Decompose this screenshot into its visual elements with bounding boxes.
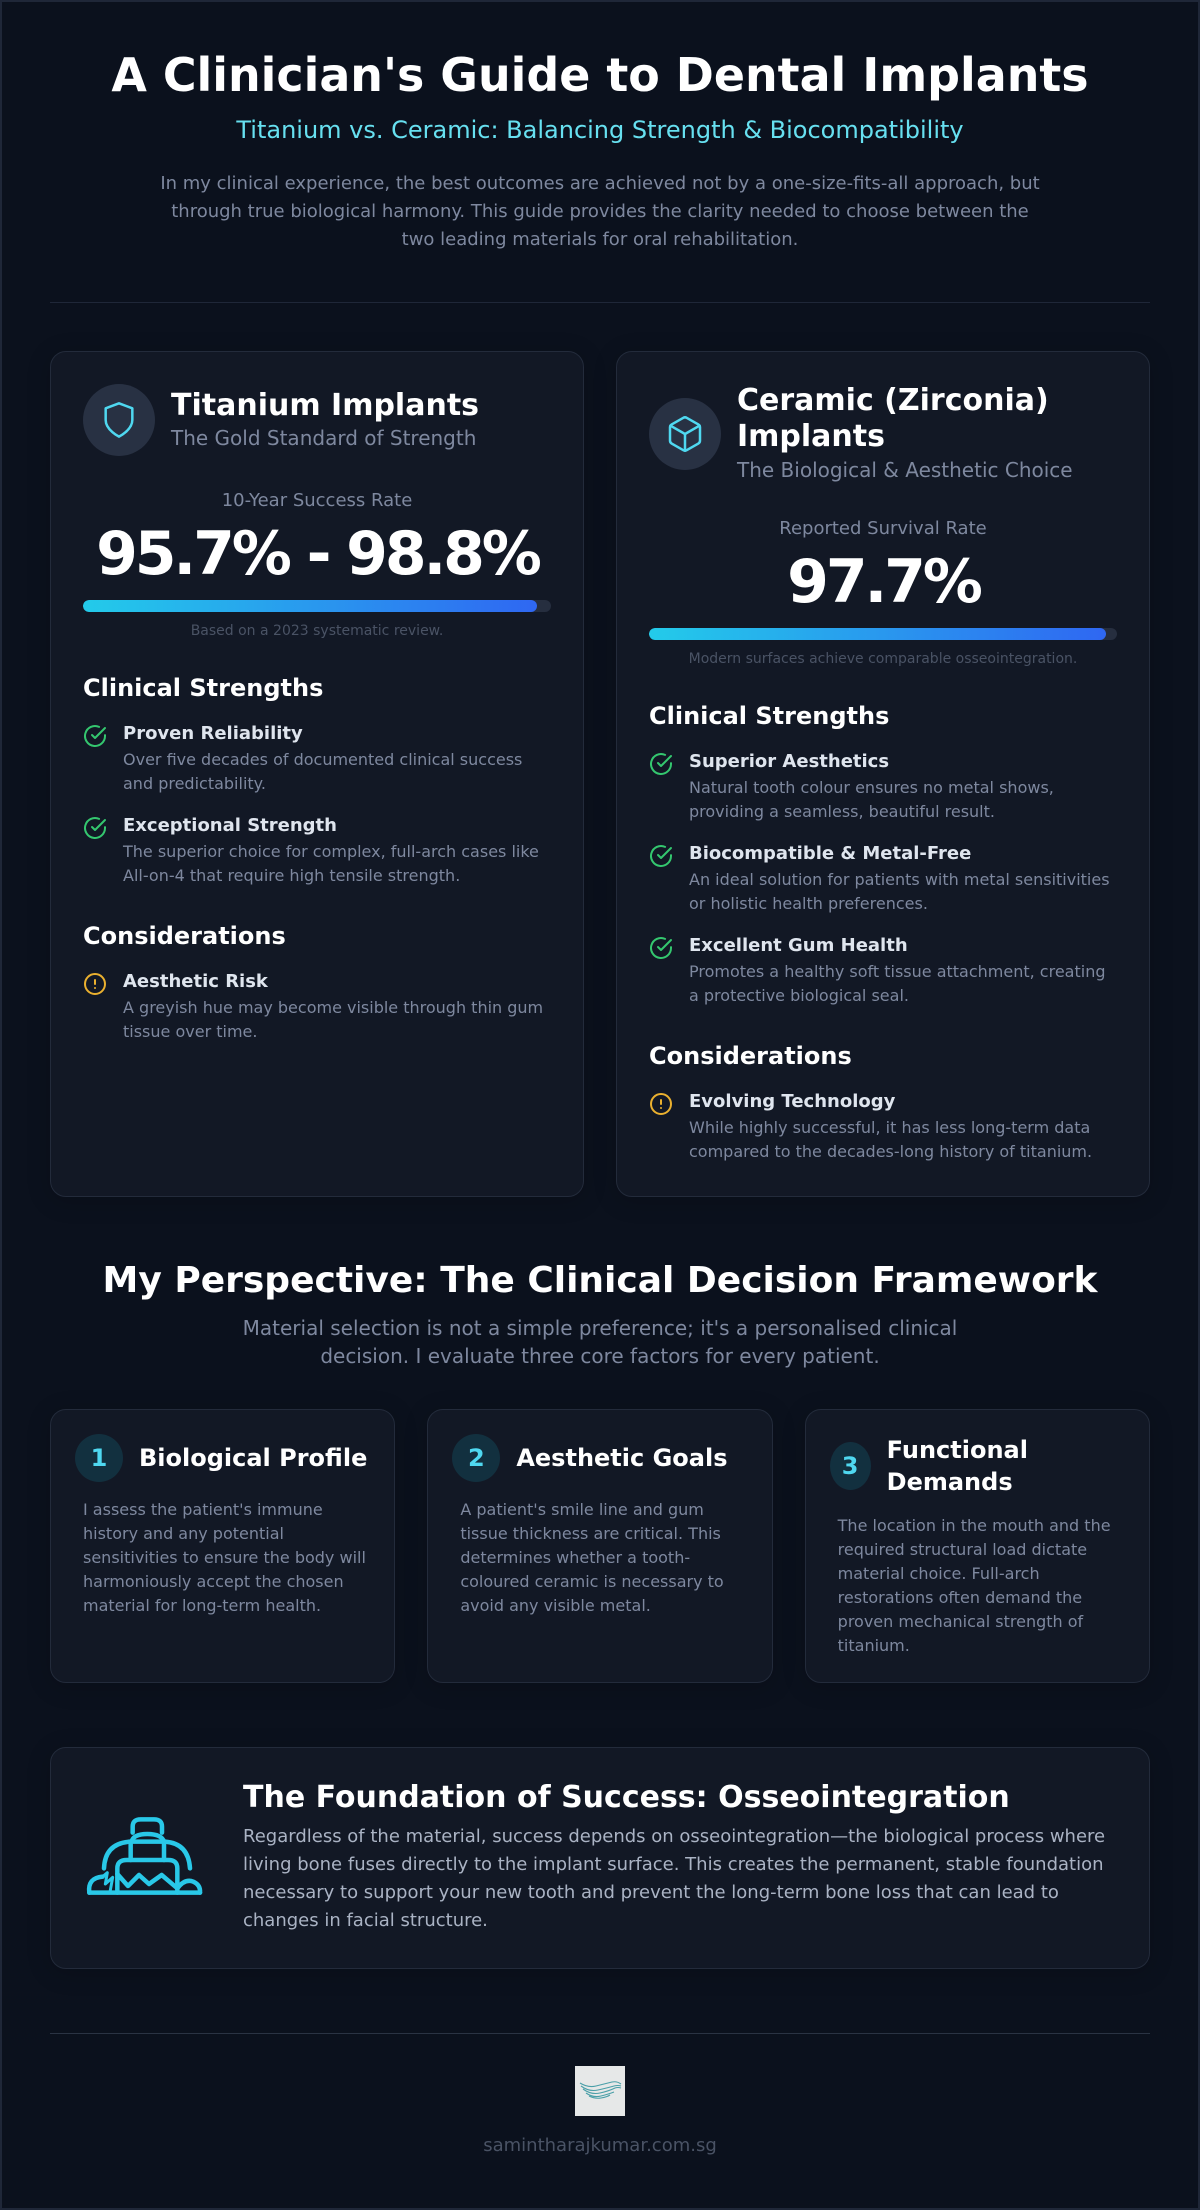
step 3 text: required structural load dictate: [838, 1540, 1087, 1559]
panel: biological profile: [50, 1409, 395, 1683]
progress bar: ceramic: [649, 628, 1117, 640]
step 3 text: material choice. Full-arch: [838, 1564, 1040, 1583]
consideration: aesthetic risk: A greyish hue may become visible through thin gum: [123, 998, 543, 1017]
step 2 text: tissue thickness are critical. This: [460, 1524, 721, 1543]
strength: proven reliability: Over five decades of documented clinical success: [123, 750, 522, 769]
consideration: evolving technology: While highly successful, it has less long-term data: [689, 1118, 1090, 1137]
intro paragraph: through true biological harmony. This guide provides the clarity needed to choose between the: [171, 201, 1029, 222]
strength: superior aesthetics: Superior Aesthetics: [689, 751, 889, 772]
osseointegration text: necessary to support your new tooth and prevent the long-term bone loss that can lead to: [243, 1882, 1059, 1903]
step 2 text: coloured ceramic is necessary to: [460, 1572, 724, 1591]
step 1 text: history and any potential: [83, 1524, 284, 1543]
strength: gum health: Excellent Gum Health: [689, 935, 908, 956]
consideration: aesthetic risk: Aesthetic Risk: [123, 971, 268, 992]
strength: proven reliability: and predictability.: [123, 774, 266, 793]
strength: biocompatible: or holistic health preferences.: [689, 894, 928, 913]
ceramic survival rate stat: 97.7%: [787, 547, 980, 617]
step 2 header: 2: [468, 1444, 485, 1472]
osseointegration text: [243, 1826, 1105, 1931]
step 2 text: A patient's smile line and gum: [460, 1500, 704, 1519]
step 3 text: titanium.: [838, 1636, 910, 1655]
intro paragraph: In my clinical experience, the best outcomes are achieved not by a one-size-fits-all approach, but: [160, 173, 1040, 194]
step 3 header: 3: [842, 1452, 858, 1480]
panel: functional demands: [805, 1409, 1150, 1683]
ceramic survival rate stat: Reported Survival Rate: [779, 518, 987, 539]
titanium strengths list: [84, 723, 539, 885]
panel: aesthetic goals: [427, 1409, 773, 1683]
intro paragraph: [160, 173, 1040, 250]
step 3 text: restorations often demand the: [838, 1588, 1082, 1607]
strength: biocompatible: An ideal solution for patients with metal sensitivities: [689, 870, 1110, 889]
titanium heading: Titanium Implants: [171, 388, 479, 422]
strength: superior aesthetics: [650, 751, 1054, 821]
intro paragraph: two leading materials for oral rehabilitation.: [402, 229, 798, 250]
osseointegration text: Regardless of the material, success depends on osseointegration—the biological process where: [243, 1826, 1105, 1847]
titanium success rate stat: [83, 490, 551, 639]
consideration: evolving technology: compared to the decades-long history of titanium.: [689, 1142, 1092, 1161]
strength: gum health: [650, 935, 1105, 1005]
heading: considerations: Considerations: [649, 1042, 852, 1070]
footer logo: [575, 2066, 625, 2116]
strength: superior aesthetics: providing a seamless, beautiful result.: [689, 802, 995, 821]
step 2 text: determines whether a tooth-: [460, 1548, 690, 1567]
step 2 text: [460, 1500, 724, 1615]
step 1 header: 1: [91, 1444, 107, 1472]
consideration: aesthetic risk: tissue over time.: [123, 1022, 257, 1041]
panel: titanium implants: [50, 351, 584, 1197]
title: A Clinician's Guide to Dental Implants: [111, 48, 1089, 102]
icon: implant in bone: [86, 1817, 202, 1895]
ceramic survival rate stat: [649, 518, 1117, 667]
consideration: aesthetic risk: [84, 971, 543, 1041]
section intro: [243, 1316, 957, 1368]
osseointegration text: living bone fuses directly to the implant surface. This creates the permanent, stable foundation: [243, 1854, 1104, 1875]
strength: exceptional strength: All-on-4 that require high tensile strength.: [123, 866, 460, 885]
step 3 header: Demands: [887, 1468, 1013, 1496]
step 3 text: proven mechanical strength of: [838, 1612, 1083, 1631]
step 3 header: [830, 1436, 1028, 1496]
step 1 header: Biological Profile: [139, 1444, 367, 1472]
strength: exceptional strength: The superior choice for complex, full-arch cases like: [123, 842, 539, 861]
ceramic heading: Ceramic (Zirconia): [737, 383, 1049, 418]
step 2 text: avoid any visible metal.: [460, 1596, 651, 1615]
ceramic heading: [736, 383, 1073, 482]
strength: gum health: Promotes a healthy soft tissue attachment, creating: [689, 962, 1105, 981]
section intro: decision. I evaluate three core factors for every patient.: [320, 1344, 880, 1368]
heading: considerations: Considerations: [83, 922, 286, 950]
consideration: evolving technology: Evolving Technology: [689, 1091, 895, 1112]
step 3 header: Functional: [887, 1436, 1028, 1464]
ceramic heading: Implants: [737, 419, 885, 454]
step 2 header: Aesthetic Goals: [516, 1444, 727, 1472]
osseointegration heading: The Foundation of Success: Osseointegration: [243, 1780, 1010, 1815]
titanium success rate stat: 95.7% - 98.8%: [96, 519, 539, 589]
step 3 text: [838, 1516, 1111, 1655]
titanium success rate stat: Based on a 2023 systematic review.: [191, 623, 443, 639]
panel: osseointegration: [50, 1747, 1150, 1969]
step 1 text: [83, 1500, 366, 1615]
ceramic heading: The Biological & Aesthetic Choice: [737, 458, 1073, 482]
heading: clinical strengths: Clinical Strengths: [83, 674, 323, 702]
section heading: clinical decision framework: My Perspective: The Clinical Decision Framework: [102, 1260, 1098, 1301]
footer website: samintharajkumar.com.sg: [483, 2135, 717, 2156]
ceramic survival rate stat: Modern surfaces achieve comparable osseointegration.: [689, 651, 1077, 667]
strength: superior aesthetics: Natural tooth colour ensures no metal shows,: [689, 778, 1054, 797]
step 3 text: The location in the mouth and the: [838, 1516, 1111, 1535]
section intro: Material selection is not a simple preference; it's a personalised clinical: [243, 1316, 957, 1340]
step 1 text: material for long-term health.: [83, 1596, 321, 1615]
step 1 header: [75, 1434, 367, 1482]
titanium success rate stat: 10-Year Success Rate: [222, 490, 412, 511]
icon: shield: [83, 384, 155, 456]
osseointegration text: changes in facial structure.: [243, 1910, 488, 1931]
step 1 text: sensitivities to ensure the body will: [83, 1548, 366, 1567]
icon: cube: [649, 398, 721, 470]
step 1 text: I assess the patient's immune: [83, 1500, 323, 1519]
titanium header: [83, 384, 479, 456]
strength: gum health: a protective biological seal.: [689, 986, 909, 1005]
ceramic strengths list: [650, 751, 1110, 1005]
strength: proven reliability: Proven Reliability: [123, 723, 303, 744]
heading: clinical strengths: Clinical Strengths: [649, 702, 889, 730]
step 2 header: [452, 1434, 727, 1482]
ceramic header: [649, 383, 1073, 482]
strength: exceptional strength: Exceptional Strength: [123, 815, 337, 836]
strength: biocompatible: Biocompatible & Metal-Free: [689, 843, 971, 864]
strength: exceptional strength: [84, 815, 539, 885]
consideration: evolving technology: [650, 1091, 1092, 1161]
step 1 text: harmoniously accept the chosen: [83, 1572, 344, 1591]
strength: proven reliability: [84, 723, 522, 793]
titanium heading: The Gold Standard of Strength: [171, 426, 476, 450]
strength: biocompatible: [650, 843, 1110, 913]
progress bar: titanium: [83, 600, 551, 612]
panel: ceramic implants: [616, 351, 1150, 1197]
subtitle: Titanium vs. Ceramic: Balancing Strength & Biocompatibility: [236, 116, 964, 144]
titanium heading: [170, 388, 479, 450]
